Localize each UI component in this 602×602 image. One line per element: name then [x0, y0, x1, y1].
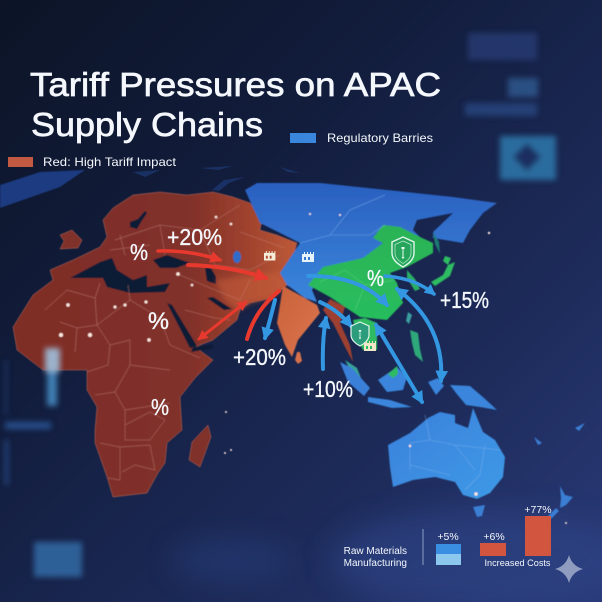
arrow: China to Japan: [385, 276, 434, 294]
category labels: Raw Materials: [344, 546, 407, 557]
region: Russia and Central Asia (blue): [245, 183, 497, 302]
bar: increased costs: +77%: [524, 504, 552, 516]
bar: increased costs: [524, 504, 552, 556]
icon: shield Thailand: [351, 322, 369, 346]
region: Southeast Asia: [340, 232, 497, 410]
map percentage labels: %: [367, 265, 384, 291]
region: Tasmania and New Zealand: [473, 423, 585, 519]
arrow: Europe to Central Asia: [158, 251, 220, 260]
arrows: blue: [265, 276, 441, 402]
bar: raw materials: [436, 531, 461, 565]
map percentage labels: %: [130, 239, 148, 265]
legend: regulatory barriers: Regulatory Barries: [327, 131, 433, 145]
arrow: India coast to Himalaya: [247, 291, 279, 339]
region: India (orange): [277, 286, 353, 364]
map percentage labels: +10%: [303, 376, 353, 402]
arrow: Pakistan to Arabia: [199, 302, 246, 339]
icon: factory centre: [302, 252, 314, 262]
map: [13, 183, 585, 524]
map percentage labels: +20%: [167, 224, 222, 250]
category labels: [344, 546, 407, 569]
category labels: Manufacturing: [344, 558, 407, 569]
icon: factory Southeast Asia: [364, 341, 376, 351]
title: [30, 66, 441, 143]
map percentage labels: +15%: [440, 287, 489, 313]
map percentage labels: +20%: [233, 344, 286, 370]
map percentage labels: %: [148, 308, 169, 335]
country borders: [45, 205, 285, 480]
background panel over Africa: [45, 348, 60, 406]
bar chart: cost legend: [344, 504, 552, 569]
icon: sparkle star: [555, 555, 583, 583]
arrow: East China to New Guinea: [397, 289, 441, 381]
legend: red high tariff impact: Red: High Tariff Impact: [43, 155, 177, 169]
bar: raw materials: +5%: [437, 531, 459, 543]
arrow: Bay of Bengal north: [323, 318, 326, 369]
arrow: Bangladesh to Thailand: [320, 302, 351, 326]
icon: factory left: [264, 251, 275, 260]
map percentage labels: [130, 224, 489, 420]
map percentage labels: %: [151, 394, 169, 420]
region: Australia: [388, 408, 505, 499]
region: China (green): [308, 225, 433, 320]
arrow: Middle East to Himalaya: [188, 265, 266, 278]
seas: [70, 211, 232, 352]
city lights: [59, 213, 567, 524]
arrow: Vietnam to Java: [376, 325, 422, 402]
region: Europe, Middle East and Africa (red): [13, 192, 297, 497]
title: Tariff Pressures on APAC: [30, 66, 441, 103]
legend: regulatory barriers: [290, 131, 433, 145]
bar: manufacturing: +6%: [483, 531, 505, 543]
arrows: red: [158, 251, 279, 339]
title: Supply Chains: [31, 106, 263, 143]
bar: manufacturing: [480, 531, 506, 556]
region: orange glow: [215, 272, 287, 310]
arrow: India south: [265, 300, 275, 338]
arrow: Tibet to East China: [308, 276, 387, 305]
bar chart: cost legend: Increased Costs: [484, 558, 551, 569]
icon: shield China: [392, 237, 414, 267]
